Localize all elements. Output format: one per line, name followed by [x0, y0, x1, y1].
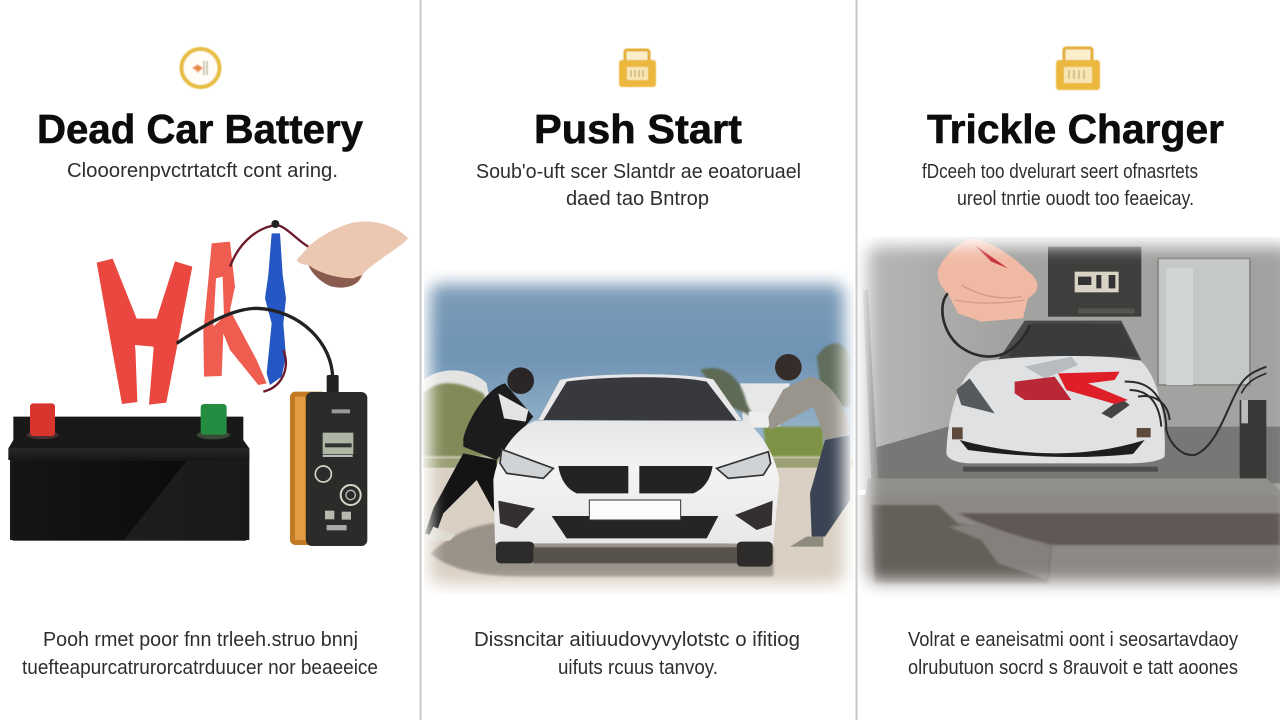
car kidney grille — [558, 466, 713, 493]
icon: red jumper clamps on hood — [1015, 357, 1128, 404]
text: panel two subtitle line 1: Soub'o-uft scer Slantdr ae eoatoruael — [476, 161, 801, 183]
shadow: car ground shadow — [430, 523, 773, 577]
icon: hand holding plug — [938, 238, 1037, 322]
text: panel one note line 1: Pooh rmet poor fnn trleeh.struo bnnj — [43, 629, 358, 651]
cable: black starter lead — [177, 308, 333, 380]
panel: push start — [423, 50, 854, 679]
cable: thin red and black lead — [230, 225, 308, 392]
figure: person right — [768, 354, 850, 547]
driveway gravel — [858, 495, 1280, 602]
garage floor — [873, 427, 1280, 483]
icon: rear red clamp — [203, 242, 267, 385]
text: panel two subtitle line 2: daed tao Bntrop — [566, 188, 709, 210]
garage side wall — [863, 290, 878, 480]
heading: dead car battery: Dead Car Battery — [37, 106, 363, 152]
garage door — [1158, 258, 1250, 385]
photo: white car on trickle charger in garage — [858, 237, 1280, 602]
wet driveway patch — [871, 505, 1051, 583]
heading: push start: Push Start — [534, 106, 742, 152]
text: panel three note line 2: olrubutuon socrd s 8rauvoit e tatt aoones — [908, 657, 1238, 679]
wall cabinet — [1048, 247, 1141, 317]
panel: trickle charger — [858, 48, 1280, 679]
heading: trickle charger: Trickle Charger — [927, 106, 1224, 152]
car license plate — [589, 500, 681, 520]
text: panel one subtitle: Clooorenpvctrtatcft cont aring. — [67, 160, 338, 182]
cables: black charger leads — [942, 293, 1266, 455]
panel: dead car battery — [8, 49, 408, 679]
icon: gold basket two — [1056, 48, 1100, 90]
text: panel three subtitle line 2: ureol tnrtie ouodt too feaeicay. — [957, 188, 1194, 210]
icon: hand — [297, 221, 408, 288]
car headlights — [500, 449, 553, 478]
text: panel two note line 2: uifuts rcuus tanvoy. — [558, 657, 718, 679]
car fog lamps — [498, 501, 535, 528]
icon: gold circle — [182, 49, 220, 87]
text: panel three note line 1: Volrat e eaneisatmi oont i seosartavdaoy — [908, 629, 1238, 651]
icon: car battery — [8, 403, 249, 541]
garage wall — [858, 237, 1280, 490]
icon: front red clamp — [97, 259, 192, 405]
garage threshold — [865, 478, 1280, 497]
icon: red terminal — [27, 403, 59, 439]
illustration: battery, clamps and jump starter — [8, 220, 408, 546]
wall charger unit — [1240, 400, 1266, 480]
text: panel two note line 1: Dissncitar aitiuudovyvylotstc o ifitiog — [474, 629, 800, 651]
text: panel one note line 2: tuefteapurcatrurorcatrduucer nor beaeeice — [22, 657, 378, 679]
icon: gold basket — [619, 50, 656, 87]
icon: white sports car — [946, 321, 1165, 472]
scenery: shrubs and distant buildings — [423, 343, 853, 468]
car lower intake — [552, 516, 718, 538]
photo: two people pushing white car — [423, 270, 854, 595]
icon: blue clamp — [265, 233, 286, 385]
figure: person left — [425, 367, 534, 541]
icon: jump starter device — [290, 392, 367, 546]
text: panel three subtitle line 1: fDceeh too dvelurart seert ofnasrtets — [922, 161, 1198, 183]
icon: white sedan — [493, 374, 779, 567]
icon: green terminal — [197, 404, 230, 439]
